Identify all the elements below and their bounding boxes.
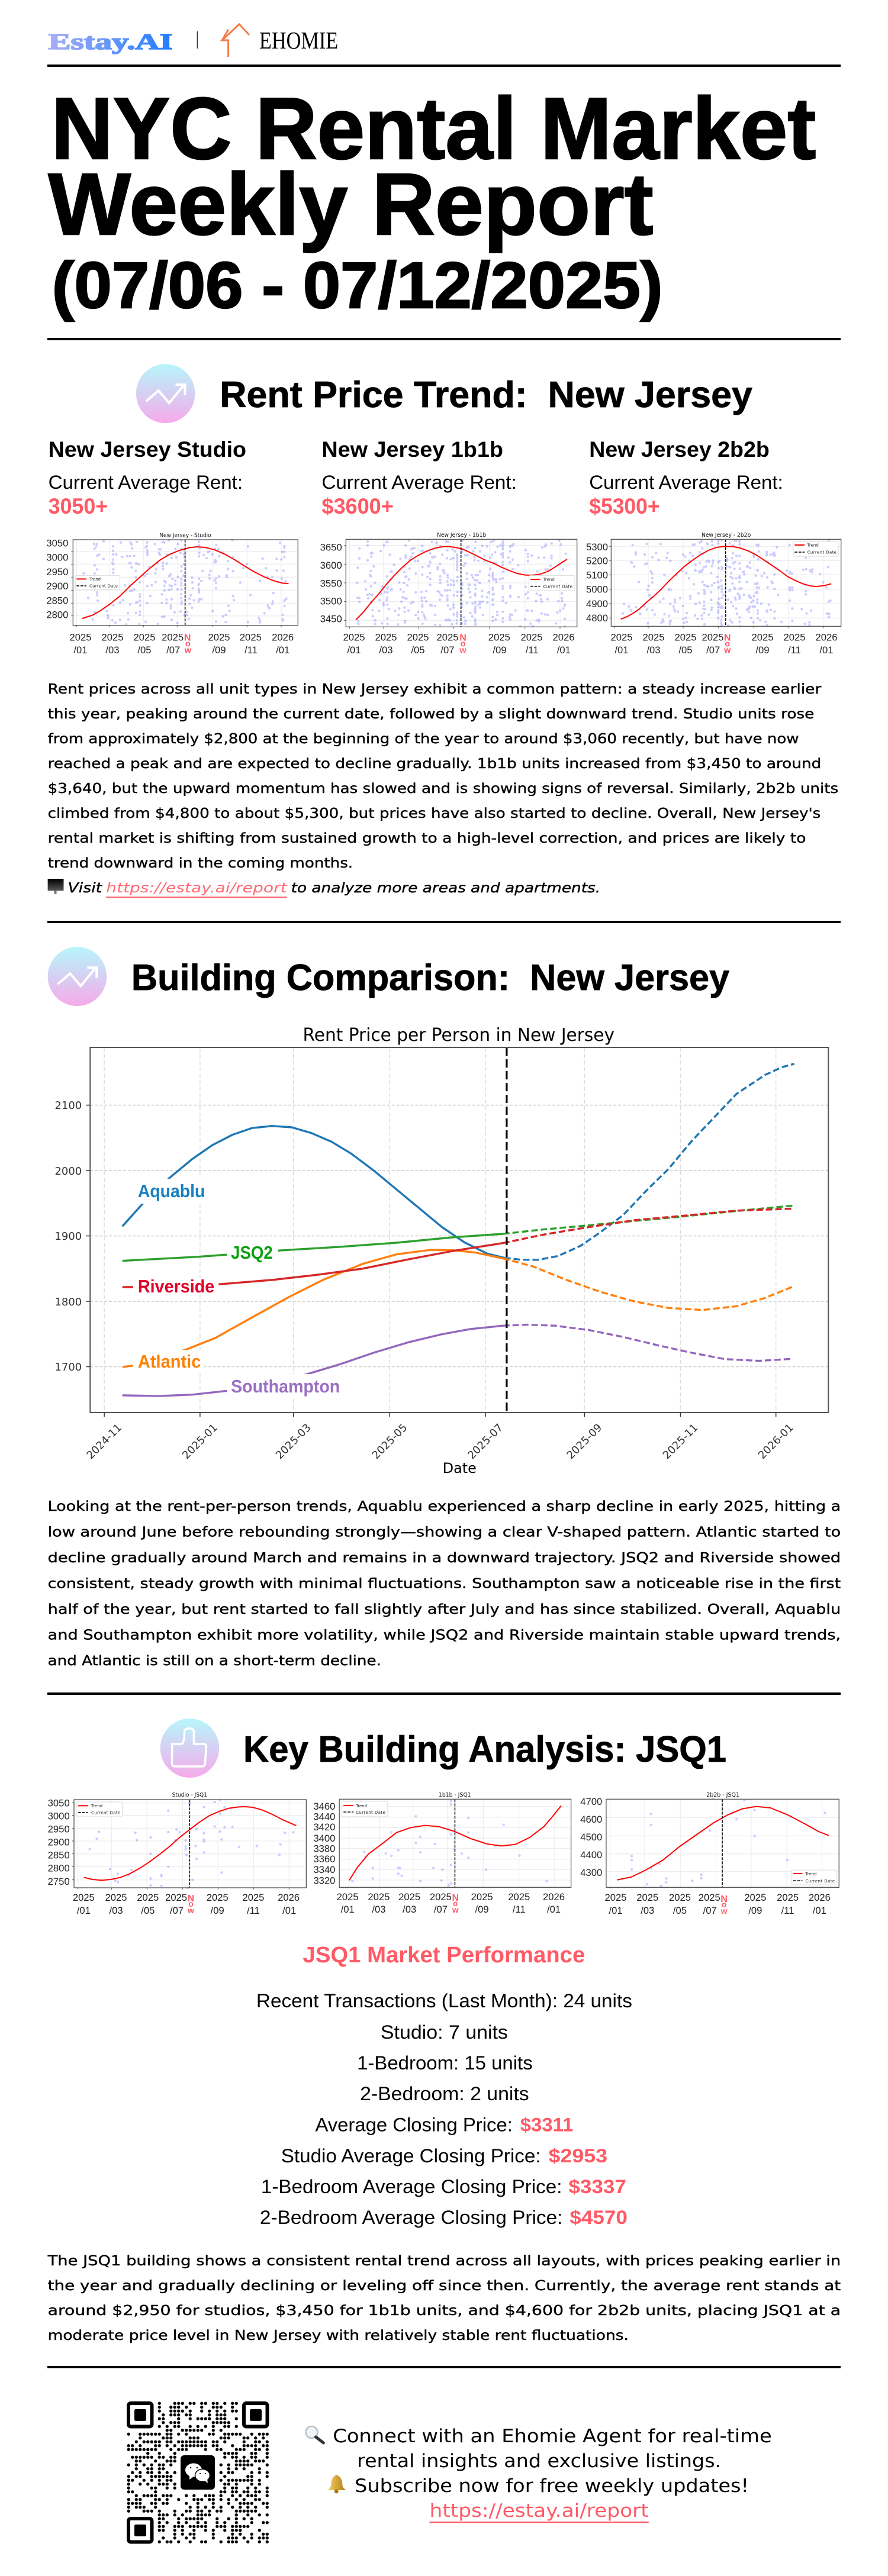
studio rent: Current Average Rent: xyxy=(49,472,243,493)
x axis labels: /01 xyxy=(282,1905,296,1916)
y axis labels: 2950 xyxy=(48,1824,70,1835)
QR code xyxy=(128,2403,268,2542)
y axis labels: 5200 xyxy=(586,555,608,566)
y axis labels xyxy=(586,541,608,624)
text block: JSQ1 summary: The JSQ1 building shows a consistent rental trend across all layouts, with prices peaking earlier in xyxy=(47,2252,841,2269)
y axis labels: 3450 xyxy=(320,614,342,625)
chart: rent price per person by building: Rent Price per Person in New Jersey xyxy=(303,1025,614,1046)
x axis labels: /05 xyxy=(411,644,425,656)
now marker: N xyxy=(188,1894,194,1904)
panel: JSQ1 market performance: Recent Transactions (Last Month): 24 units xyxy=(256,1990,632,2011)
y axis labels: 4300 xyxy=(580,1867,602,1878)
call to action line xyxy=(67,879,600,898)
x axis labels: 2025 xyxy=(343,632,365,643)
legend xyxy=(792,1870,836,1885)
logo: Ehomie: EHOMIE xyxy=(259,27,338,54)
y axis labels: 2950 xyxy=(46,566,68,578)
now marker: o xyxy=(188,1899,194,1908)
section heading: building comparison xyxy=(48,947,730,1006)
x axis labels: 2025 xyxy=(208,632,230,643)
y axis labels: 3380 xyxy=(313,1843,335,1855)
x axis labels: /11 xyxy=(513,1904,526,1915)
x axis labels xyxy=(337,1891,565,1915)
section heading: key building analysis: Key Building Analysis: JSQ1 xyxy=(243,1729,726,1770)
x axis labels xyxy=(605,1892,831,1916)
1b1b rent: New Jersey 1b1b xyxy=(321,437,503,462)
x axis labels: /01 xyxy=(77,1905,91,1916)
studio rent: New Jersey Studio xyxy=(49,437,246,462)
2b2b rent: $5300+ xyxy=(589,494,660,518)
y axis labels: 3420 xyxy=(313,1821,335,1833)
text block: building comparison summary: consistent, steady growth with minimal fluctuations. Southampton saw a noticeable rise in the first xyxy=(48,1575,841,1592)
2b2b rent: Current Average Rent: xyxy=(589,472,783,493)
text block: building comparison summary: low around June before rebounding strongly—showing a clear V-shaped pattern. Atlantic started to xyxy=(48,1523,841,1540)
now marker: N xyxy=(720,1894,728,1904)
y axis labels: 3600 xyxy=(320,560,342,571)
x axis labels: /01 xyxy=(341,1904,355,1915)
call to action: Connect with an Ehomie Agent for real-time xyxy=(333,2426,772,2447)
chart: New Jersey studio: New Jersey - Studio xyxy=(159,533,211,539)
text block: rent trend summary: from approximately $2,800 at the beginning of the year to around $3,060 recently, but have now xyxy=(48,730,799,747)
x axis labels: 2025 xyxy=(407,632,429,643)
y axis labels: 2750 xyxy=(48,1876,70,1887)
icon: computer xyxy=(48,879,63,894)
x axis labels: /09 xyxy=(211,1905,224,1916)
panel: current rents xyxy=(49,437,783,518)
x axis labels: /09 xyxy=(755,644,770,656)
x axis labels: /01 xyxy=(547,1904,561,1915)
title: Weekly Report xyxy=(49,156,654,253)
1b1b rent: $3600+ xyxy=(321,494,394,518)
x axis labels: 2025 xyxy=(488,632,510,643)
y axis labels: 3360 xyxy=(313,1853,335,1865)
one bedroom closing price: $3337 xyxy=(568,2176,626,2197)
now marker: N xyxy=(459,633,466,643)
section heading: rent price trend xyxy=(136,364,752,423)
now marker xyxy=(723,633,731,655)
x axis labels: 2025 xyxy=(242,1892,264,1903)
call to action: Subscribe now for free weekly updates! xyxy=(355,2475,749,2497)
now marker: w xyxy=(459,646,466,655)
y axis labels: 1800 xyxy=(55,1296,82,1308)
x axis labels: 2025 xyxy=(471,1891,493,1903)
x axis labels: /03 xyxy=(110,1905,123,1916)
chart: New Jersey 2b2b xyxy=(586,532,841,656)
panel: JSQ1 market performance: 2-Bedroom: 2 units xyxy=(360,2083,529,2104)
legend: Current Date xyxy=(805,1879,835,1884)
x axis labels xyxy=(610,632,838,656)
x axis labels: /01 xyxy=(819,644,834,656)
x axis labels: /03 xyxy=(403,1904,416,1915)
x axis labels: 2025 xyxy=(702,632,724,643)
y axis labels xyxy=(320,542,342,625)
y axis labels xyxy=(55,1100,82,1374)
x axis labels: 2025 xyxy=(669,1892,691,1903)
now marker: w xyxy=(184,646,192,655)
text block: building comparison summary: and Atlantic is still on a short-term decline. xyxy=(48,1652,381,1669)
y axis labels: 3320 xyxy=(313,1875,335,1887)
x axis labels: /01 xyxy=(609,1905,623,1916)
x axis date labels: 2025-07 xyxy=(465,1421,506,1462)
chart: JSQ1 studio: Studio - JSQ1 xyxy=(172,1792,207,1798)
title: (07/06 - 07/12/2025) xyxy=(52,250,663,322)
x axis labels: /03 xyxy=(379,644,393,656)
panel: JSQ1 market performance: 1-Bedroom: 15 units xyxy=(357,2052,533,2074)
x axis date labels: 2025-03 xyxy=(274,1421,314,1462)
legend: Current Date xyxy=(543,584,572,589)
x axis labels: 2025 xyxy=(375,632,397,643)
chart: JSQ1 2b2b: 2b2b - JSQ1 xyxy=(706,1792,739,1798)
legend: Current Date xyxy=(89,584,118,589)
now marker xyxy=(452,1893,459,1914)
now marker xyxy=(187,1894,194,1915)
y axis labels: 3550 xyxy=(320,578,342,589)
x axis labels: /07 xyxy=(170,1905,184,1916)
now marker: w xyxy=(452,1905,459,1914)
line: Southampton xyxy=(123,1324,793,1396)
chart: JSQ1 2b2b xyxy=(580,1792,839,1916)
y axis labels: 4600 xyxy=(580,1814,602,1825)
y axis labels: 2000 xyxy=(55,1165,82,1178)
x axis labels: /07 xyxy=(706,644,720,656)
x axis labels: 2025 xyxy=(783,632,806,643)
legend xyxy=(529,576,575,591)
x axis labels: /01 xyxy=(813,1905,826,1916)
x axis labels: 2025 xyxy=(636,1892,658,1903)
now marker: o xyxy=(722,1900,726,1909)
call to action line: https://estay.ai/report xyxy=(106,879,288,896)
text block: JSQ1 summary: around $2,950 for studios, $3,450 for 1b1b units, and $4,600 for 2b2b units, placing JSQ1 at a xyxy=(48,2302,841,2319)
x axis labels: /11 xyxy=(788,644,801,656)
now marker: o xyxy=(725,640,730,649)
x axis labels: /07 xyxy=(703,1905,717,1916)
legend: Trend xyxy=(89,577,101,582)
line: JSQ2 xyxy=(123,1205,794,1261)
QR modules xyxy=(128,2403,267,2542)
x axis labels: 2025 xyxy=(674,632,697,643)
header logos xyxy=(49,24,338,57)
now marker: o xyxy=(461,640,466,649)
x axis labels: 2025 xyxy=(605,1892,626,1903)
text block: building comparison summary: decline gradually around March and remains in a downward trajectory. JSQ2 and Riverside showed xyxy=(48,1549,841,1566)
y axis labels: 2800 xyxy=(48,1863,70,1874)
x axis labels: 2025 xyxy=(73,1892,95,1903)
now marker: N xyxy=(452,1893,459,1903)
x axis labels: /01 xyxy=(347,644,361,656)
x axis labels: /09 xyxy=(212,644,226,656)
text block: rent trend summary: trend downward in the coming months. xyxy=(48,855,353,871)
studio closing price: $2953 xyxy=(549,2145,607,2166)
text block: building comparison summary: half of the year, but rent started to fall slightly after July and has since stabilized. Overall, Aquablu xyxy=(48,1601,841,1617)
x axis labels: 2026 xyxy=(543,1891,565,1903)
x axis labels: 2025 xyxy=(744,1892,766,1903)
x axis labels: /05 xyxy=(678,644,693,656)
y axis labels: 2900 xyxy=(48,1837,70,1848)
1b1b rent xyxy=(321,437,517,518)
text block: rent trend summary xyxy=(48,681,838,898)
logo: house icon xyxy=(222,24,249,57)
chart: JSQ1 1b1b xyxy=(313,1792,571,1915)
y axis labels: 2850 xyxy=(48,1849,70,1861)
x axis labels: /03 xyxy=(641,1905,654,1916)
x axis labels: 2025 xyxy=(69,632,92,643)
line: Atlantic xyxy=(123,1250,794,1367)
x axis labels: 2025 xyxy=(162,632,184,643)
one bedroom closing price: 1-Bedroom Average Closing Price: xyxy=(261,2176,562,2197)
x axis labels: 2025 xyxy=(699,1892,720,1903)
call to action line: to analyze more areas and apartments. xyxy=(291,879,600,896)
building trend lines xyxy=(123,1064,794,1396)
section heading: key building analysis xyxy=(160,1719,726,1778)
building labels xyxy=(127,1179,343,1397)
x axis labels: /05 xyxy=(137,644,152,656)
average closing price: Average Closing Price: xyxy=(315,2114,513,2136)
now marker: o xyxy=(453,1898,458,1908)
y axis labels: 5000 xyxy=(586,584,608,595)
link: https://estay.ai/report xyxy=(430,2500,649,2522)
chart: New Jersey studio xyxy=(46,533,298,656)
y axis labels: 3500 xyxy=(320,596,342,607)
panel: JSQ1 market performance: JSQ1 Market Performance xyxy=(303,1943,585,1968)
studio closing price: Studio Average Closing Price: xyxy=(281,2145,541,2166)
icon: trend arrow xyxy=(136,364,195,423)
x axis labels: 2025 xyxy=(642,632,665,643)
x axis labels: /03 xyxy=(372,1904,385,1915)
now marker xyxy=(184,633,192,655)
x axis labels: /11 xyxy=(244,644,258,656)
call to action line: Visit xyxy=(67,879,102,896)
y axis labels: 1900 xyxy=(55,1230,82,1243)
text block: rent trend summary: reached a peak and are expected to decline gradually. 1b1b units increased from $3,450 to around xyxy=(48,755,821,772)
chart: New Jersey 1b1b xyxy=(320,532,577,656)
x axis labels: 2025 xyxy=(105,1892,127,1903)
y axis labels: 4900 xyxy=(586,598,608,610)
panel: JSQ1 market performance xyxy=(256,1943,632,2228)
x axis labels: /01 xyxy=(276,644,289,656)
x axis date labels: 2025-01 xyxy=(180,1421,220,1462)
now marker xyxy=(459,633,466,655)
x axis labels: 2025 xyxy=(337,1891,359,1903)
label: Aquablu: Aquablu xyxy=(138,1181,205,1201)
y axis labels: 3440 xyxy=(313,1811,335,1823)
chart: New Jersey 2b2b: New Jersey - 2b2b xyxy=(702,532,751,539)
text block: JSQ1 summary: the year and gradually declining or leveling off since then. Currently, the average rent stands at xyxy=(48,2277,841,2294)
call to action: rental insights and exclusive listings. xyxy=(357,2451,721,2472)
y axis labels: 3000 xyxy=(48,1810,70,1821)
x axis labels: 2026 xyxy=(552,632,575,643)
y axis labels: 4700 xyxy=(580,1796,602,1807)
1b1b rent: Current Average Rent: xyxy=(321,472,517,493)
x axis labels: /01 xyxy=(73,644,88,656)
y axis labels: 4500 xyxy=(580,1832,602,1843)
x axis labels: 2025 xyxy=(398,1891,420,1903)
x axis labels xyxy=(343,632,575,656)
y axis labels: 1700 xyxy=(55,1361,82,1374)
x axis labels: 2025 xyxy=(508,1891,530,1903)
x axis date labels xyxy=(84,1421,796,1462)
legend: Current Date xyxy=(356,1810,385,1815)
icon: magnifying glass xyxy=(306,2426,323,2443)
section heading: building comparison: Building Comparison: New Jersey xyxy=(131,957,730,998)
y axis labels: 3000 xyxy=(46,552,68,563)
x axis labels: 2026 xyxy=(815,632,838,643)
x axis labels: 2025 xyxy=(751,632,774,643)
chart: New Jersey 1b1b: New Jersey - 1b1b xyxy=(437,532,486,539)
studio rent: 3050+ xyxy=(49,494,108,518)
x axis labels: 2025 xyxy=(368,1891,390,1903)
chart: rent price per person by building: Date xyxy=(443,1460,477,1476)
QR finder squares xyxy=(128,2403,268,2542)
legend xyxy=(75,575,120,589)
y axis labels: 5100 xyxy=(586,569,608,581)
x axis labels: 2026 xyxy=(278,1892,300,1903)
title xyxy=(49,80,816,322)
text block: rent trend summary: this year, peaking around the current date, followed by a slight downward trend. Studio units rose xyxy=(48,705,814,722)
y axis labels: 2850 xyxy=(46,595,68,606)
two bedroom closing price: $4570 xyxy=(570,2207,628,2228)
x axis labels: 2025 xyxy=(610,632,633,643)
y axis labels xyxy=(46,537,68,620)
2b2b rent xyxy=(589,437,783,518)
x axis labels: /07 xyxy=(440,644,455,656)
x axis labels: 2025 xyxy=(207,1892,229,1903)
y axis labels: 3400 xyxy=(313,1833,335,1844)
x axis labels: 2025 xyxy=(101,632,124,643)
x axis labels: 2026 xyxy=(272,632,294,643)
text block: JSQ1 summary: moderate price level in New Jersey with relatively stable rent fluctuations. xyxy=(48,2327,629,2343)
y axis labels: 3050 xyxy=(46,537,68,549)
line: Aquablu xyxy=(123,1064,794,1260)
2b2b rent: New Jersey 2b2b xyxy=(589,437,770,462)
x axis labels: 2025 xyxy=(520,632,543,643)
y axis labels: 4400 xyxy=(580,1849,602,1861)
text block: building comparison summary: Looking at the rent-per-person trends, Aquablu experienced a sharp decline in early 2025, hitting a xyxy=(48,1498,841,1514)
now marker: w xyxy=(720,1906,728,1916)
text block: rent trend summary: climbed from $4,800 to about $5,300, but prices have also started to decline. Overall, New Jersey's xyxy=(48,805,821,821)
y axis labels: 3340 xyxy=(313,1864,335,1875)
title: NYC Rental Market xyxy=(52,80,816,178)
text block: rent trend summary: $3,640, but the upward momentum has slowed and is showing signs of reversal. Similarly, 2b2b units xyxy=(48,780,838,797)
chart: JSQ1 studio xyxy=(48,1792,306,1916)
two bedroom closing price: 2-Bedroom Average Closing Price: xyxy=(260,2207,562,2228)
label: Southampton: Southampton xyxy=(231,1376,340,1397)
text block: JSQ1 summary xyxy=(47,2252,841,2343)
y axis labels: 5300 xyxy=(586,541,608,553)
line: Riverside xyxy=(123,1208,794,1287)
x axis labels: 2025 xyxy=(430,1891,452,1903)
x axis labels: /07 xyxy=(434,1904,448,1915)
x axis labels: /09 xyxy=(493,644,507,656)
x axis date labels: 2025-11 xyxy=(661,1421,700,1462)
average closing price: $3311 xyxy=(520,2114,573,2136)
x axis labels: 2025 xyxy=(777,1892,799,1903)
y axis labels xyxy=(48,1798,70,1887)
x axis labels: /01 xyxy=(614,644,629,656)
now marker: w xyxy=(723,646,731,655)
now marker: o xyxy=(185,640,191,649)
x axis labels: /07 xyxy=(166,644,180,656)
x axis labels: /01 xyxy=(557,644,571,656)
y axis labels: 3460 xyxy=(313,1801,335,1812)
legend: Trend xyxy=(807,543,819,548)
y axis labels: 2100 xyxy=(55,1100,82,1112)
label: JSQ2: JSQ2 xyxy=(231,1242,273,1263)
section heading: rent price trend: Rent Price Trend: New Jersey xyxy=(220,375,752,415)
text block: rent trend summary: rental market is shifting from sustained growth to a high-level correction, and prices are likely to xyxy=(48,830,806,846)
legend xyxy=(76,1802,123,1817)
legend: Current Date xyxy=(807,550,836,555)
y axis labels xyxy=(580,1796,602,1878)
legend: Trend xyxy=(805,1872,816,1877)
x axis labels: 2025 xyxy=(137,1892,159,1903)
x axis date labels: 2024-11 xyxy=(84,1421,124,1462)
logo: Estay.AI: Estay.AI xyxy=(49,30,173,54)
icon: thumbs up xyxy=(160,1719,219,1778)
y axis labels: 2800 xyxy=(46,609,68,620)
x axis labels: /03 xyxy=(105,644,120,656)
legend xyxy=(793,541,838,556)
text block: building comparison summary xyxy=(48,1498,841,1669)
x axis labels: 2025 xyxy=(436,632,459,643)
y axis labels: 4800 xyxy=(586,612,608,624)
icon: trend arrow xyxy=(48,947,107,1006)
y axis labels xyxy=(313,1801,335,1887)
now marker: N xyxy=(724,633,731,643)
icon: WeChat logo xyxy=(181,2455,215,2490)
chart: JSQ1 1b1b: 1b1b - JSQ1 xyxy=(439,1792,471,1798)
now marker: N xyxy=(184,633,191,643)
now marker: w xyxy=(187,1906,194,1915)
x axis labels: /11 xyxy=(247,1905,260,1916)
now marker xyxy=(720,1894,728,1916)
x axis labels: /09 xyxy=(748,1905,762,1916)
legend: Trend xyxy=(355,1804,367,1808)
legend: Current Date xyxy=(91,1811,120,1816)
x axis labels: 2026 xyxy=(809,1892,831,1903)
label: Atlantic: Atlantic xyxy=(138,1351,201,1372)
x axis labels: /09 xyxy=(475,1904,489,1915)
x axis labels: /05 xyxy=(141,1905,155,1916)
call to action xyxy=(306,2426,772,2523)
x axis labels xyxy=(73,1892,300,1916)
x axis date labels: 2025-09 xyxy=(565,1421,604,1462)
legend: Trend xyxy=(91,1804,102,1808)
x axis date labels: 2026-01 xyxy=(756,1421,796,1462)
x axis labels: 2025 xyxy=(165,1892,187,1903)
studio rent xyxy=(49,437,246,518)
x axis labels xyxy=(69,632,294,656)
chart: rent price per person by building xyxy=(55,1025,828,1476)
legend: Trend xyxy=(543,578,555,582)
x axis labels: /05 xyxy=(673,1905,687,1916)
x axis labels: /11 xyxy=(781,1905,794,1916)
x axis labels: /03 xyxy=(646,644,661,656)
x axis labels: 2025 xyxy=(133,632,156,643)
legend xyxy=(342,1801,388,1817)
icon: bell xyxy=(327,2475,346,2494)
x axis date labels: 2025-05 xyxy=(370,1421,410,1462)
label: Riverside: Riverside xyxy=(138,1276,214,1297)
text block: rent trend summary: Rent prices across all unit types in New Jersey exhibit a common pattern: a steady increase earlier xyxy=(48,681,822,697)
y axis labels: 2900 xyxy=(46,581,68,592)
x axis labels: /11 xyxy=(526,644,539,656)
panel: JSQ1 market performance: Studio: 7 units xyxy=(381,2022,508,2043)
text block: building comparison summary: and Southampton exhibit more volatility, while JSQ2 and Riverside maintain stable upward trends, xyxy=(48,1626,841,1643)
y axis labels: 3050 xyxy=(48,1798,70,1809)
y axis labels: 3650 xyxy=(320,542,342,553)
x axis labels: 2025 xyxy=(240,632,262,643)
